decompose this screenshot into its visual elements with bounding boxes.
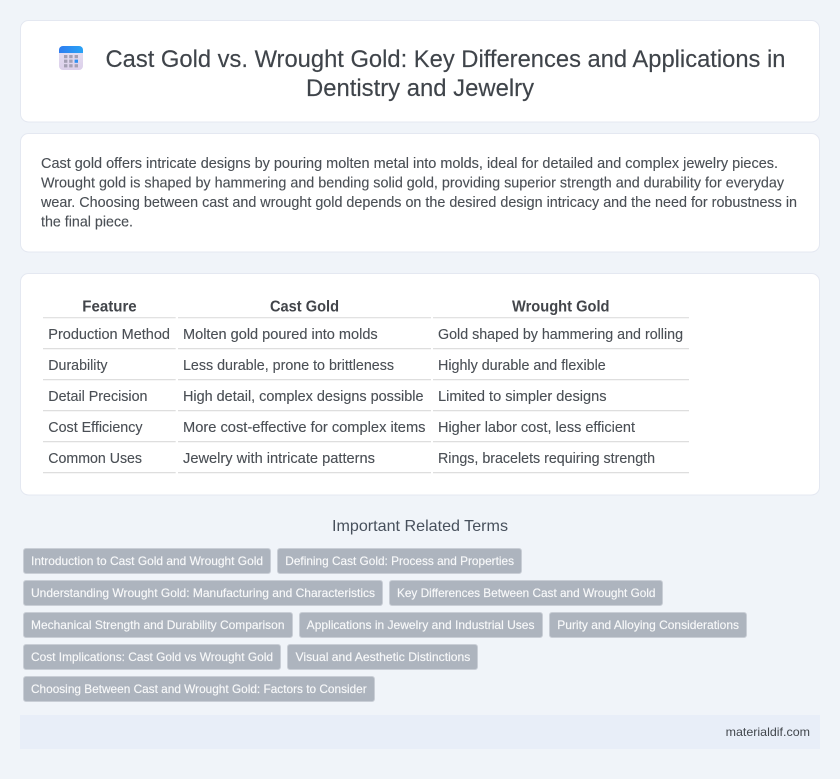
footer: materialdif.com: [726, 725, 810, 739]
description text: the final piece.: [41, 214, 133, 230]
tag: Purity and Alloying Considerations: [557, 618, 739, 632]
row: production method: Molten gold poured into molds: [183, 327, 378, 343]
row: production method: Gold shaped by hammering and rolling: [438, 327, 683, 343]
panel: title: [20, 20, 820, 122]
row: cost efficiency: Higher labor cost, less efficient: [438, 420, 635, 436]
tag: Key Differences Between Cast and Wrought Gold: [397, 586, 656, 600]
tag: [278, 548, 522, 574]
panel: comparison table: [20, 274, 820, 495]
row: detail precision: [48, 389, 607, 405]
row: common uses: Jewelry with intricate patterns: [183, 451, 375, 467]
row: common uses: Rings, bracelets requiring strength: [438, 451, 655, 467]
row: common uses: Common Uses: [48, 451, 142, 467]
description text: [40, 156, 797, 230]
row: durability: Less durable, prone to brittleness: [183, 358, 394, 374]
tag: [550, 612, 746, 638]
tag: Understanding Wrought Gold: Manufacturing and Characteristics: [31, 586, 375, 600]
tag: Introduction to Cast Gold and Wrought Gold: [31, 554, 263, 568]
row: durability: [48, 358, 606, 374]
row: common uses: [48, 451, 655, 467]
tag: Defining Cast Gold: Process and Properties: [285, 554, 514, 568]
title text: Dentistry and Jewelry: [306, 75, 534, 102]
description text: Cast gold offers intricate designs by pouring molten metal into molds, ideal for detailed and complex jewelry pieces.: [41, 156, 778, 172]
table header: Feature: [82, 299, 137, 316]
tag: [24, 580, 382, 606]
heading: related terms: Important Related Terms: [332, 518, 508, 535]
tag: Mechanical Strength and Durability Comparison: [31, 618, 284, 632]
tag: Visual and Aesthetic Distinctions: [296, 650, 470, 664]
icon: calendar: [59, 46, 83, 70]
row: cost efficiency: Cost Efficiency: [48, 420, 143, 436]
row: cost efficiency: More cost-effective for complex items: [183, 420, 426, 436]
row: detail precision: High detail, complex designs possible: [183, 389, 424, 405]
row: production method: Production Method: [48, 327, 170, 343]
row: cost efficiency: [48, 420, 635, 436]
row: detail precision: Limited to simpler designs: [438, 389, 606, 405]
title text: [106, 46, 786, 102]
row: detail precision: Detail Precision: [48, 389, 147, 405]
panel: description: [20, 134, 820, 252]
tag: [300, 612, 542, 638]
tag: Applications in Jewelry and Industrial Uses: [307, 618, 534, 632]
table header: [82, 299, 610, 316]
tag: [24, 548, 270, 574]
tag: [390, 580, 662, 606]
table header: Wrought Gold: [512, 299, 610, 316]
footer: [20, 715, 820, 749]
description text: wear. Choosing between cast and wrought gold depends on the desired design intricacy and the need for robustness in: [40, 195, 797, 211]
title text: Cast Gold vs. Wrought Gold: Key Differences and Applications in: [106, 46, 786, 73]
row: durability: Durability: [48, 358, 108, 374]
tag: [24, 676, 374, 702]
row: durability: Highly durable and flexible: [438, 358, 606, 374]
tag: [24, 612, 292, 638]
row: production method: [48, 327, 683, 343]
tag: [24, 644, 280, 670]
tag: [288, 644, 478, 670]
tag: Cost Implications: Cast Gold vs Wrought Gold: [31, 650, 273, 664]
related term tags: [24, 548, 746, 702]
description text: Wrought gold is shaped by hammering and bending solid gold, providing superior strength and durability for everyday: [41, 176, 785, 192]
tag: Choosing Between Cast and Wrought Gold: Factors to Consider: [31, 682, 367, 696]
table header: Cast Gold: [270, 299, 339, 316]
